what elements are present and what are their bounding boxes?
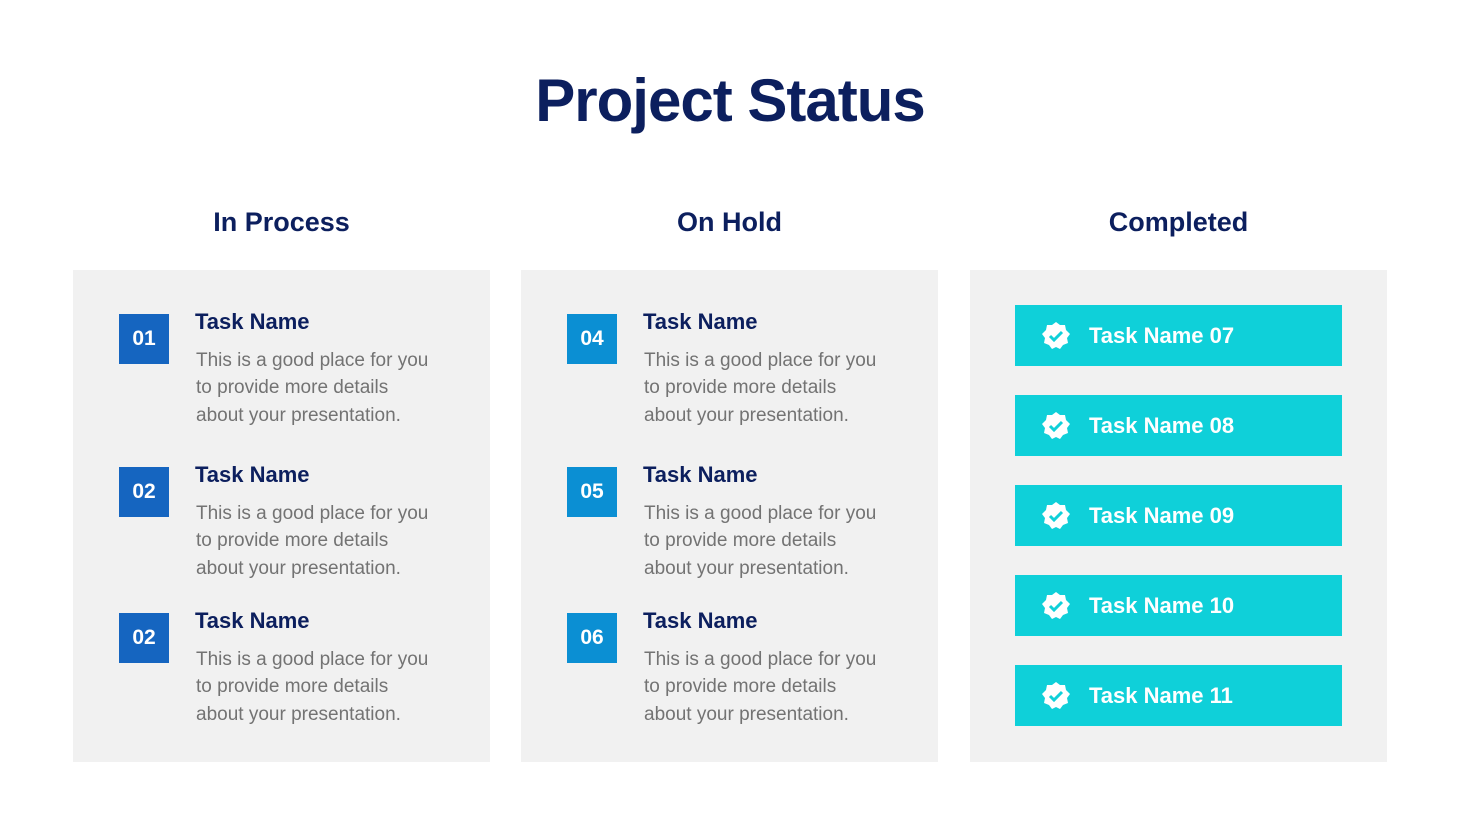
task 02b: about your presentation. [196, 704, 401, 725]
task 04: to provide more details [644, 377, 836, 398]
panel: in process [73, 270, 490, 762]
task 06: about your presentation. [644, 704, 849, 725]
task 02: about your presentation. [196, 558, 401, 579]
task 02b: This is a good place for you [196, 649, 428, 670]
heading: In Process: In Process [213, 207, 350, 237]
task 04: about your presentation. [644, 405, 849, 426]
task 02b: Task Name [195, 608, 310, 633]
heading: On Hold: On Hold [677, 207, 782, 237]
title: Project Status [535, 67, 925, 134]
task 05: Task Name [643, 462, 758, 487]
task 05: to provide more details [644, 530, 836, 551]
task 02: 02 [132, 480, 156, 503]
task 04: Task Name [643, 309, 758, 334]
task 02b: to provide more details [196, 676, 388, 697]
task 05: about your presentation. [644, 558, 849, 579]
task 02: This is a good place for you [196, 503, 428, 524]
panel: on hold [521, 270, 938, 762]
task 02: Task Name [195, 462, 310, 487]
bar 08 [1015, 395, 1342, 456]
task 02b: 02 [132, 626, 156, 649]
task 06: This is a good place for you [644, 649, 876, 670]
task 02: to provide more details [196, 530, 388, 551]
task 04: 04 [580, 327, 604, 350]
task 01: This is a good place for you [196, 350, 428, 371]
task 02 [119, 462, 428, 579]
task 05: 05 [580, 480, 604, 503]
task 01: about your presentation. [196, 405, 401, 426]
bar 07: Task Name 07 [1089, 323, 1234, 348]
bar 09: Task Name 09 [1089, 503, 1234, 528]
task 01 [119, 309, 428, 426]
task 06: to provide more details [644, 676, 836, 697]
task 01: Task Name [195, 309, 310, 334]
task 01: to provide more details [196, 377, 388, 398]
bar 11: Task Name 11 [1089, 683, 1233, 708]
task 06: 06 [580, 626, 604, 649]
task 04: This is a good place for you [644, 350, 876, 371]
task 05 [567, 462, 876, 579]
task 01: 01 [132, 327, 156, 350]
panel: completed [970, 270, 1387, 762]
bar 08: Task Name 08 [1089, 413, 1234, 438]
bar 09 [1015, 485, 1342, 546]
task 06: Task Name [643, 608, 758, 633]
bar 07 [1015, 305, 1342, 366]
bar 10: Task Name 10 [1089, 593, 1234, 618]
heading: Completed: Completed [1109, 207, 1248, 237]
bar 10 [1015, 575, 1342, 636]
task 05: This is a good place for you [644, 503, 876, 524]
task 02b [119, 608, 428, 725]
bar 11 [1015, 665, 1342, 726]
task 04 [567, 309, 876, 426]
task 06 [567, 608, 876, 725]
